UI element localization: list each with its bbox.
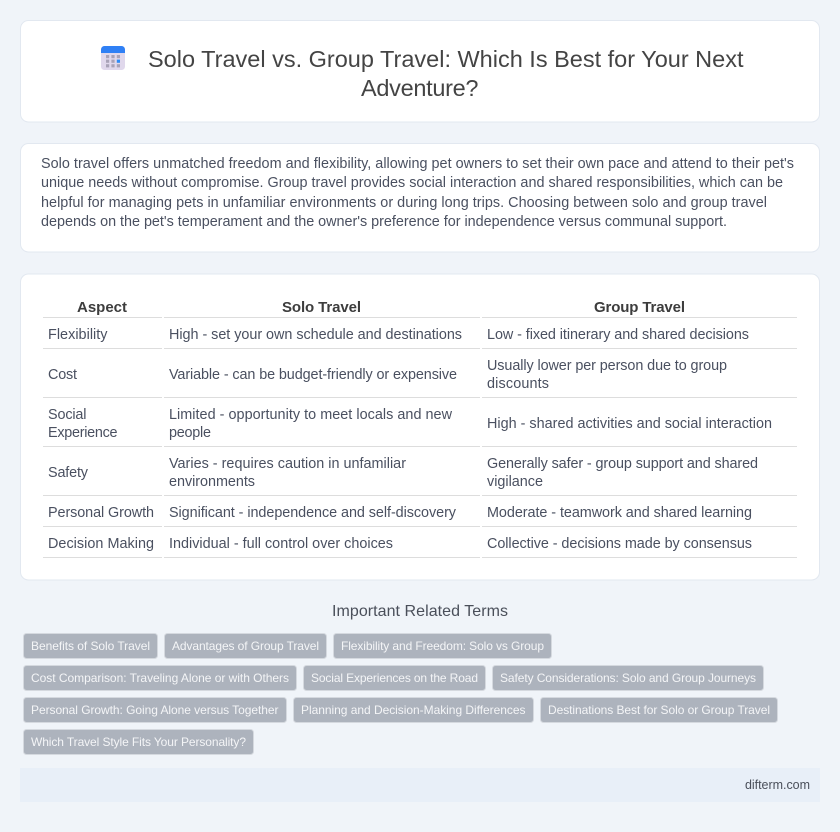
tag [24, 634, 158, 658]
related term tags [24, 634, 778, 754]
tag [492, 666, 764, 690]
table row: safety: environments [169, 474, 255, 490]
panel: title header [20, 20, 820, 122]
tag: Social Experiences on the Road [311, 671, 478, 685]
text block: summary paragraph: Solo travel offers unmatched freedom and flexibility, allowing pet owners to set their own pace and attend to their pet's [41, 156, 794, 172]
table row: social experience: Social [48, 407, 86, 423]
tag [24, 698, 286, 722]
table row: flexibility: Low - fixed itinerary and shared decisions [487, 327, 749, 343]
tag: Flexibility and Freedom: Solo vs Group [341, 639, 544, 653]
tag: Which Travel Style Fits Your Personality? [31, 735, 246, 749]
table row: decision making: Individual - full control over choices [169, 536, 393, 552]
tag: Planning and Decision-Making Differences [301, 703, 526, 717]
table row: safety: Varies - requires caution in unfamiliar [169, 456, 406, 472]
table row: cost: Usually lower per person due to group [487, 358, 727, 374]
tag [24, 730, 254, 754]
title: Adventure? [361, 75, 478, 101]
table row: decision making: Collective - decisions made by consensus [487, 536, 752, 552]
tag [24, 666, 296, 690]
text block: summary paragraph: depends on the pet's temperament and the owner's preference for independence versus communal support. [41, 214, 727, 230]
table header row: Solo Travel [282, 299, 361, 316]
text block: summary paragraph [41, 156, 794, 230]
tag: Cost Comparison: Traveling Alone or with Others [31, 671, 289, 685]
table row: flexibility: High - set your own schedule and destinations [169, 327, 462, 343]
table row: personal growth: Personal Growth [48, 505, 154, 521]
table row: personal growth: Moderate - teamwork and shared learning [487, 505, 752, 521]
table row: safety: vigilance [487, 474, 543, 490]
table row: cost [43, 358, 797, 398]
heading: important related terms: Important Related Terms [332, 603, 508, 620]
title: Solo Travel vs. Group Travel: Which Is Best for Your Next [148, 46, 744, 72]
table header row: Group Travel [594, 299, 685, 316]
text block: summary paragraph: unique needs without compromise. Group travel provides social interaction and shared responsibilities, which can be [41, 175, 783, 191]
table row: personal growth: Significant - independence and self-discovery [169, 505, 457, 521]
table row: flexibility [43, 327, 797, 349]
table row: social experience: Experience [48, 425, 118, 441]
tag: Destinations Best for Solo or Group Travel [548, 703, 770, 717]
table header row [43, 299, 797, 318]
table row: cost: Variable - can be budget-friendly or expensive [169, 367, 457, 383]
table row: cost: Cost [48, 367, 77, 383]
table row: social experience: High - shared activities and social interaction [487, 416, 772, 432]
tag [540, 698, 778, 722]
tag [164, 634, 326, 658]
table row: decision making: Decision Making [48, 536, 154, 552]
footer source text: difterm.com [745, 778, 810, 792]
table row: decision making [43, 536, 797, 558]
table row: social experience: people [169, 425, 211, 441]
table row: flexibility: Flexibility [48, 327, 108, 343]
tag [334, 634, 552, 658]
panel: comparison table [20, 274, 820, 580]
footer [20, 768, 820, 802]
table row: safety: Generally safer - group support and shared [487, 456, 758, 472]
icon: calendar [101, 46, 125, 70]
tag [294, 698, 534, 722]
table row: safety [43, 456, 797, 496]
tag: Personal Growth: Going Alone versus Together [31, 703, 278, 717]
table row: personal growth [43, 505, 797, 527]
title [148, 46, 744, 101]
table header row: Aspect [77, 299, 127, 316]
table row: safety: Safety [48, 465, 89, 481]
tag: Advantages of Group Travel [172, 639, 319, 653]
text block: summary paragraph: helpful for managing pets in unfamiliar environments or during long trips. Choosing between solo and group travel [41, 195, 767, 211]
tag [304, 666, 486, 690]
tag: Benefits of Solo Travel [31, 639, 150, 653]
table row: social experience: Limited - opportunity to meet locals and new [169, 407, 453, 423]
table row: social experience [43, 407, 797, 447]
tag: Safety Considerations: Solo and Group Journeys [500, 671, 756, 685]
table row: cost: discounts [487, 376, 549, 392]
panel: description [20, 144, 820, 252]
